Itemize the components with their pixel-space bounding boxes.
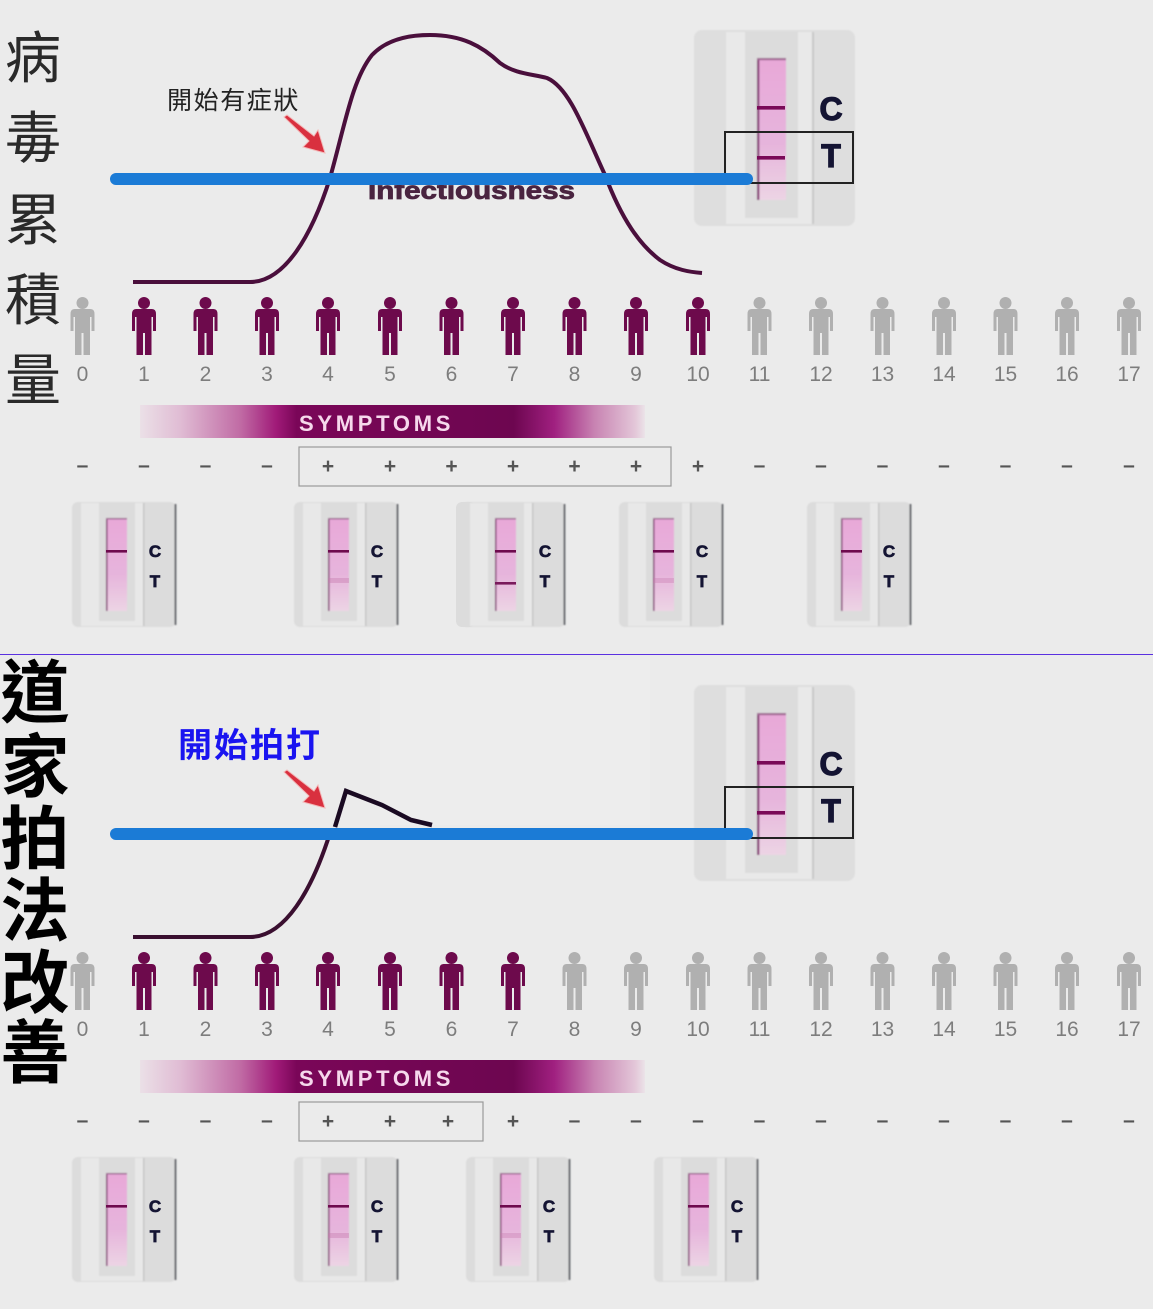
test result signs: – [815, 1109, 827, 1132]
day numbers: 16 [1055, 1018, 1079, 1041]
day numbers: 0 [77, 363, 88, 386]
test result signs: – [754, 454, 766, 477]
symptoms bar: SYMPTOMS [299, 411, 454, 436]
day numbers [77, 1018, 1141, 1041]
day numbers: 0 [77, 1018, 88, 1041]
small test cards: T [732, 1227, 743, 1246]
test result signs: + [692, 455, 704, 478]
day numbers: 1 [138, 363, 150, 386]
test result signs: – [1061, 454, 1073, 477]
arrow: to the curve [284, 115, 325, 153]
small test cards: T [540, 572, 551, 591]
test result signs: + [630, 455, 642, 478]
day numbers: 2 [200, 363, 211, 386]
test result signs: + [442, 1110, 454, 1133]
side title: 病毒累積量: 累 [5, 189, 61, 252]
side title: 病毒累積量: 毒 [5, 107, 61, 170]
test result signs: – [200, 1109, 212, 1132]
small test cards: C [371, 542, 383, 561]
small test cards: T [150, 572, 161, 591]
large test card: C [819, 746, 843, 782]
threshold line [116, 173, 747, 185]
label: onset of symptoms: 開始有症狀 [167, 87, 300, 115]
hand-drawn reduced curve [335, 791, 432, 827]
side title: 道家拍法改善: 拍 [0, 801, 70, 878]
test result signs: – [692, 1109, 704, 1132]
day numbers: 5 [384, 363, 396, 386]
day numbers: 4 [322, 1018, 334, 1041]
day numbers: 16 [1055, 363, 1079, 386]
symptoms bar: SYMPTOMS [299, 1066, 454, 1091]
test result signs: – [754, 1109, 766, 1132]
large test card [694, 30, 855, 226]
test result signs: – [630, 1109, 642, 1132]
day numbers: 14 [932, 1018, 956, 1041]
day numbers: 9 [630, 1018, 642, 1041]
large test card [694, 685, 855, 881]
test result signs: – [1123, 454, 1135, 477]
side title: 病毒累積量 [5, 27, 61, 412]
test result signs: + [322, 1110, 334, 1133]
side title: 病毒累積量: 病 [5, 27, 61, 90]
test result signs: + [568, 455, 581, 478]
label: start of patting: 開始拍打 [178, 727, 322, 765]
small test cards: T [544, 1227, 555, 1246]
small test cards: C [149, 1197, 161, 1216]
panel: virus load, after [0, 655, 1141, 1282]
small test cards: T [884, 572, 895, 591]
test result signs: + [384, 455, 396, 478]
small test cards: C [543, 1197, 555, 1216]
test result signs: + [384, 1110, 396, 1133]
test result signs: + [507, 455, 519, 478]
test result signs: + [322, 455, 334, 478]
test result signs: – [261, 454, 273, 477]
small test cards [72, 502, 911, 627]
erased curve patch [380, 660, 650, 825]
test result signs: – [138, 1109, 150, 1132]
small test cards: C [883, 542, 895, 561]
test result signs: – [77, 1109, 89, 1132]
test result signs: – [1000, 454, 1012, 477]
day numbers: 2 [200, 1018, 211, 1041]
test result signs: – [138, 454, 150, 477]
day numbers: 6 [446, 363, 457, 386]
side title: 道家拍法改善 [0, 655, 70, 1092]
small test cards: T [372, 1227, 383, 1246]
day numbers: 11 [749, 1018, 770, 1041]
day numbers: 7 [507, 363, 519, 386]
day numbers: 17 [1117, 1018, 1141, 1041]
day numbers: 12 [809, 1018, 833, 1041]
test result signs: – [938, 454, 950, 477]
threshold line [116, 828, 747, 840]
day numbers: 10 [686, 363, 710, 386]
day numbers: 3 [261, 363, 273, 386]
test result signs: – [1000, 1109, 1012, 1132]
test result signs: – [1123, 1109, 1135, 1132]
large test card: T [821, 138, 841, 174]
day numbers: 17 [1117, 363, 1141, 386]
side title: 病毒累積量: 量 [5, 349, 61, 412]
people timeline, days 0 to 17 [70, 952, 1141, 1010]
day numbers: 4 [322, 363, 334, 386]
day numbers: 6 [446, 1018, 457, 1041]
test result signs: – [877, 1109, 889, 1132]
day numbers: 15 [994, 363, 1017, 386]
small test cards: C [371, 1197, 383, 1216]
large test card: C [819, 91, 843, 127]
test result signs: – [200, 454, 212, 477]
arrow: to the curve [284, 770, 325, 808]
test result signs: + [445, 455, 458, 478]
test result signs: – [77, 454, 89, 477]
test result signs: – [261, 1109, 273, 1132]
divider line [0, 654, 1153, 655]
day numbers: 7 [507, 1018, 519, 1041]
day numbers: 8 [569, 1018, 580, 1041]
side title: 病毒累積量: 積 [5, 269, 61, 332]
small test cards: C [149, 542, 161, 561]
test result signs: – [1061, 1109, 1073, 1132]
small test cards [72, 1157, 758, 1282]
day numbers: 8 [569, 363, 580, 386]
test result signs: + [507, 1110, 519, 1133]
day numbers: 13 [871, 1018, 894, 1041]
curve, rising part [133, 833, 330, 937]
side title: 道家拍法改善: 家 [0, 729, 70, 806]
small test cards: T [372, 572, 383, 591]
day numbers: 14 [932, 363, 956, 386]
large test card: T [821, 793, 841, 829]
day numbers: 15 [994, 1018, 1017, 1041]
small test cards: C [696, 542, 708, 561]
small test cards: T [150, 1227, 161, 1246]
test result signs [77, 447, 1135, 486]
day numbers: 1 [138, 1018, 150, 1041]
small test cards: C [731, 1197, 743, 1216]
side title: 道家拍法改善: 道 [0, 655, 70, 732]
test result signs [77, 1102, 1135, 1141]
side title: 道家拍法改善: 法 [0, 873, 70, 950]
side title: 道家拍法改善: 善 [0, 1015, 70, 1092]
test result signs: – [877, 454, 889, 477]
day numbers: 3 [261, 1018, 273, 1041]
panel: virus load, before [5, 27, 1141, 627]
test result signs: – [815, 454, 827, 477]
heading: infectiousness: Infectiousness [368, 177, 575, 205]
small test cards: C [539, 542, 551, 561]
day numbers: 12 [809, 363, 833, 386]
side title: 道家拍法改善: 改 [0, 945, 70, 1022]
people timeline, days 0 to 17 [70, 297, 1141, 355]
infectiousness curve [133, 35, 702, 282]
small test cards: T [697, 572, 708, 591]
symptoms bar [140, 1060, 645, 1093]
day numbers: 5 [384, 1018, 396, 1041]
day numbers: 13 [871, 363, 894, 386]
day numbers: 11 [749, 363, 770, 386]
day numbers: 9 [630, 363, 642, 386]
day numbers: 10 [686, 1018, 710, 1041]
test result signs: – [938, 1109, 950, 1132]
symptoms bar [140, 405, 645, 438]
day numbers [77, 363, 1141, 386]
test result signs: – [569, 1109, 581, 1132]
